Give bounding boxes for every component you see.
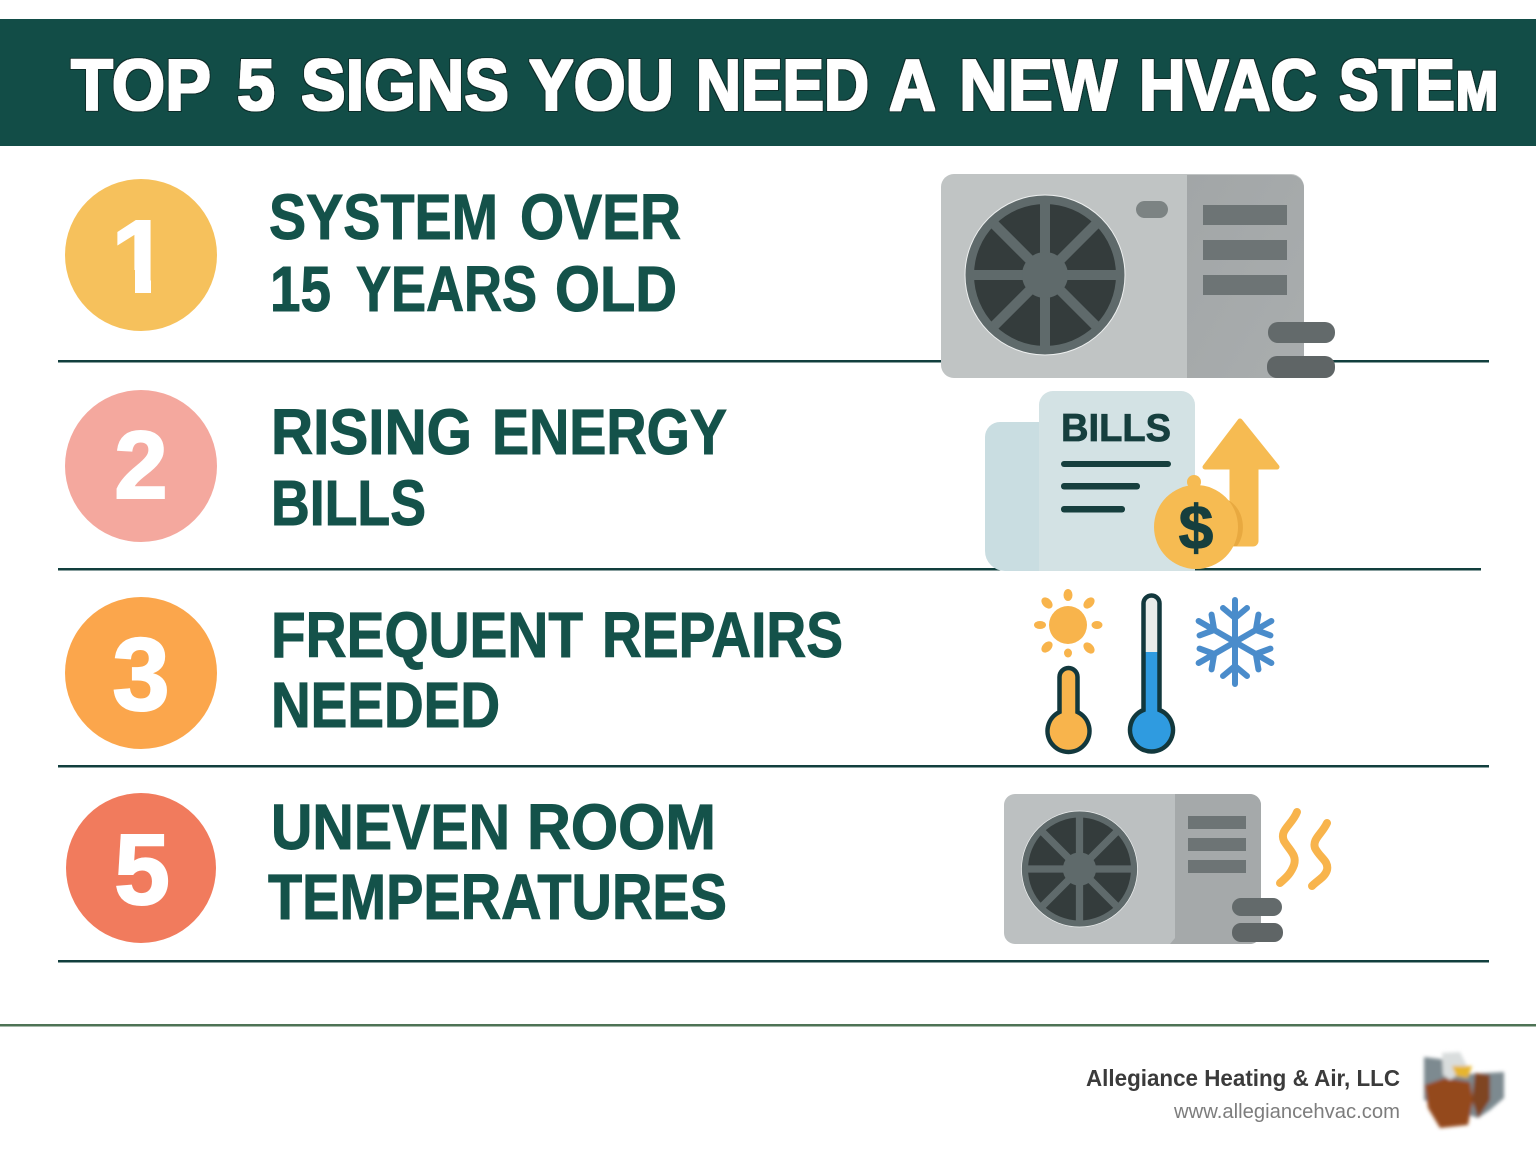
icon: temperature swings: [1034, 589, 1277, 752]
panel: sign 5: [66, 791, 1327, 944]
heading: frequent repairs needed: FREQUENT: [271, 599, 583, 671]
title banner: [0, 19, 1536, 146]
footer: company credit: www.allegiancehvac.com: [1173, 1101, 1400, 1123]
number badge 1: [65, 179, 217, 331]
icon: bills with rising cost: [985, 391, 1277, 571]
icon: eagle mascot logo: [1424, 1052, 1504, 1128]
title banner: SIGNS: [301, 46, 509, 126]
footer: company credit: Allegiance Heating & Air, LLC: [1086, 1065, 1400, 1091]
icon: up arrow: [1205, 421, 1277, 544]
number badge 3: [65, 597, 217, 749]
heading: system over 15 years old: SYSTEM: [269, 181, 498, 253]
number badge 3: 3: [112, 617, 170, 732]
title banner: TOP: [71, 46, 211, 126]
title banner: STEм: [1339, 46, 1499, 126]
icon: warm thermometer: [1047, 668, 1090, 752]
panel: sign 2: [65, 390, 1277, 571]
icon: cool thermometer: [1130, 596, 1173, 751]
heading: rising energy bills: ENERGY: [492, 396, 726, 468]
number badge 5: 5: [114, 814, 170, 926]
heading: frequent repairs needed: NEEDED: [271, 669, 500, 741]
icon: sun: [1034, 589, 1102, 658]
number badge 2: 2: [114, 412, 168, 519]
heading: uneven room temperatures: UNEVEN: [271, 791, 510, 863]
heading: frequent repairs needed: REPAIRS: [602, 599, 843, 671]
footer: company credit: [1086, 1052, 1504, 1128]
icon: snowflake: [1193, 600, 1277, 684]
title banner: 5: [237, 46, 275, 126]
title banner: YOU: [529, 46, 674, 126]
title banner: NEW: [959, 46, 1117, 126]
heading: rising energy bills: BILLS: [271, 467, 426, 539]
icon: dollar coin: [1154, 475, 1238, 569]
title banner: NEED: [696, 46, 869, 126]
number badge 2: [65, 390, 217, 542]
icon: bills with rising cost: BILLS: [1061, 407, 1171, 450]
heading: system over 15 years old: OVER: [520, 181, 681, 253]
icon: overheating AC unit: [1004, 794, 1327, 944]
title banner: A: [889, 46, 936, 126]
heading: rising energy bills: RISING: [271, 396, 472, 468]
panel: sign 1: [65, 174, 1335, 378]
icon: outdoor AC unit: [941, 174, 1335, 378]
title banner: HVAC: [1139, 46, 1317, 126]
heading: system over 15 years old: YEARS: [356, 253, 537, 325]
heading: uneven room temperatures: ROOM: [527, 791, 716, 863]
heading: system over 15 years old: 15: [270, 253, 331, 325]
panel: sign 3: [65, 589, 1277, 752]
icon: heat waves: [1280, 812, 1327, 886]
heading: uneven room temperatures: TEMPERATURES: [268, 861, 727, 933]
number badge 5: [66, 793, 216, 943]
number badge 1: 1: [111, 199, 169, 314]
icon: dollar coin: $: [1179, 494, 1213, 563]
heading: system over 15 years old: OLD: [555, 253, 677, 325]
